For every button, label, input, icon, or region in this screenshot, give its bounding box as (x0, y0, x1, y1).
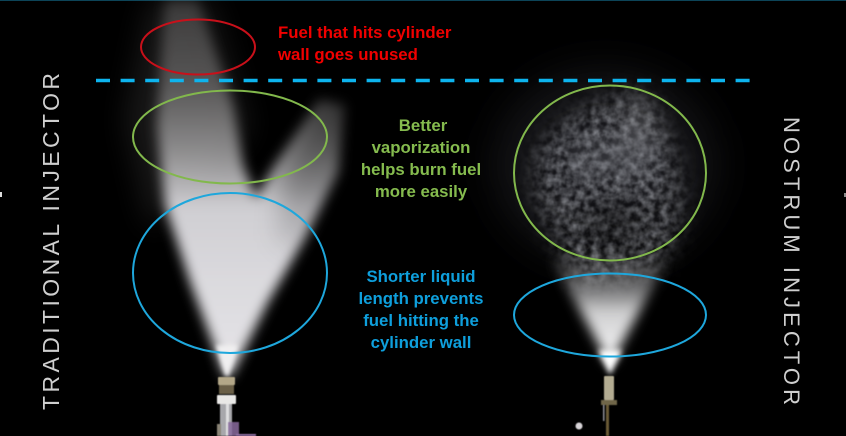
nostrum injector hardware (576, 376, 617, 436)
green callout: Better (399, 116, 448, 135)
cylinder wall dashed line (96, 79, 752, 82)
red callout: Fuel that hits cylinder (278, 23, 452, 42)
nostrum injector spray photo (495, 70, 715, 374)
red callout: wall goes unused (277, 45, 418, 64)
green callout: vaporization (372, 138, 470, 157)
blue ellipse: nostrum liquid length (514, 274, 706, 356)
vapor cloud texture (535, 95, 680, 285)
blue callout: fuel hitting the (363, 311, 479, 330)
V-shaped spray body (157, 0, 344, 376)
traditional injector spray photo (125, 0, 365, 376)
blue callout: length prevents (359, 289, 483, 308)
lower cloud dark patch (580, 199, 644, 251)
green callout: more easily (375, 182, 468, 201)
blue callout: Shorter liquid (366, 267, 476, 286)
mid cloud band (565, 135, 660, 180)
tip glow (598, 350, 622, 374)
dimming of right plume (275, 80, 365, 270)
haze (495, 70, 715, 260)
green ellipse: traditional vaporization zone (133, 90, 327, 184)
green ellipse: nostrum vaporization zone (514, 86, 706, 260)
edge marks (0, 192, 2, 197)
nozzle glow (216, 345, 238, 376)
green callout: helps burn fuel (361, 160, 481, 179)
cone (552, 258, 668, 362)
top edge line (0, 0, 846, 1)
upper right cloud (615, 98, 662, 160)
traditional injector label: TRADITIONAL INJECTOR (38, 73, 64, 410)
blue ellipse: traditional liquid length (133, 193, 327, 353)
traditional injector hardware (217, 377, 256, 436)
blue callout: cylinder wall (371, 333, 471, 352)
red ellipse: unused fuel zone (141, 20, 255, 74)
faint outer haze (125, 0, 250, 230)
nostrum injector label: NOSTRUM INJECTOR (779, 117, 804, 405)
